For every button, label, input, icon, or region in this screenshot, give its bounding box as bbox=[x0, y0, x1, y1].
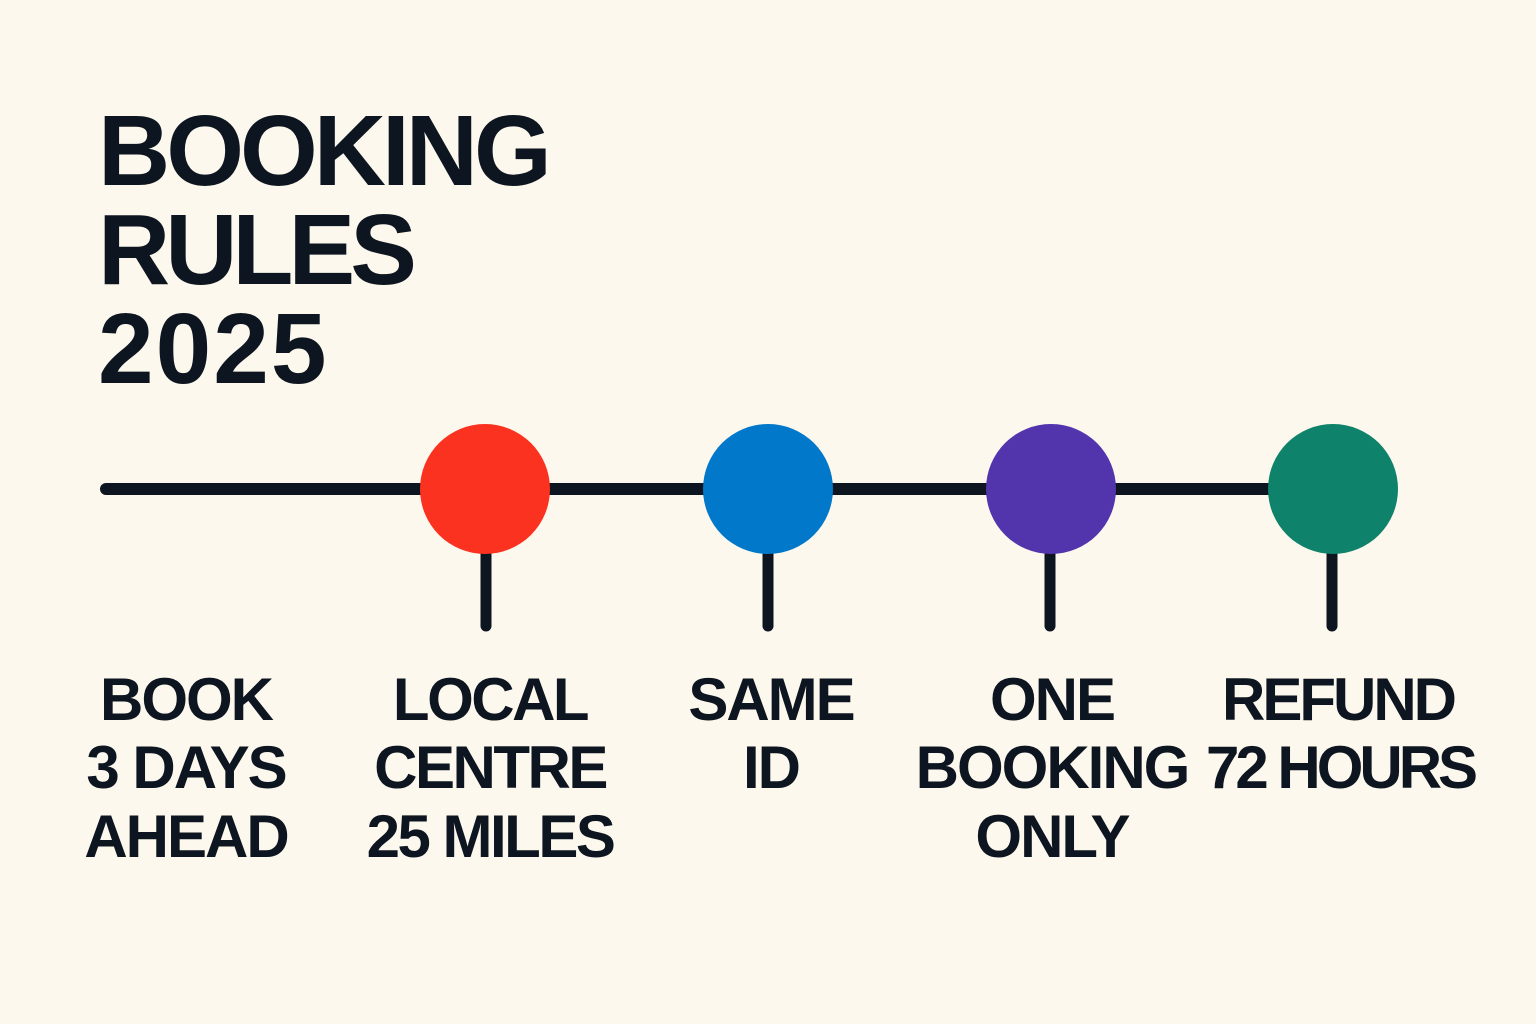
title: BOOKING bbox=[98, 95, 548, 207]
label: same id: ID bbox=[743, 734, 799, 801]
circle: blue bbox=[703, 424, 833, 554]
stems bbox=[486, 540, 1332, 626]
label: one booking only: BOOKING bbox=[916, 734, 1188, 801]
label: refund: 72 HOURS bbox=[1206, 734, 1476, 801]
title: 2025 bbox=[98, 293, 328, 405]
label: same id: SAME bbox=[688, 666, 854, 733]
label: book 3 days ahead: 3 DAYS bbox=[86, 734, 286, 801]
circle: green bbox=[1268, 424, 1398, 554]
label: book 3 days ahead: AHEAD bbox=[84, 803, 288, 870]
circle: red bbox=[420, 424, 550, 554]
label: one booking only: ONE bbox=[990, 666, 1114, 733]
label: refund: REFUND bbox=[1222, 666, 1454, 733]
label: local centre: 25 MILES bbox=[367, 803, 614, 870]
label: local centre: LOCAL bbox=[393, 666, 587, 733]
label: local centre: CENTRE bbox=[374, 734, 606, 801]
title bbox=[98, 95, 548, 405]
circle: purple bbox=[986, 424, 1116, 554]
labels bbox=[84, 666, 1476, 870]
label: book 3 days ahead: BOOK bbox=[100, 666, 272, 733]
timeline line bbox=[106, 483, 1330, 495]
label: one booking only: ONLY bbox=[975, 803, 1131, 870]
title: RULES bbox=[98, 194, 413, 306]
